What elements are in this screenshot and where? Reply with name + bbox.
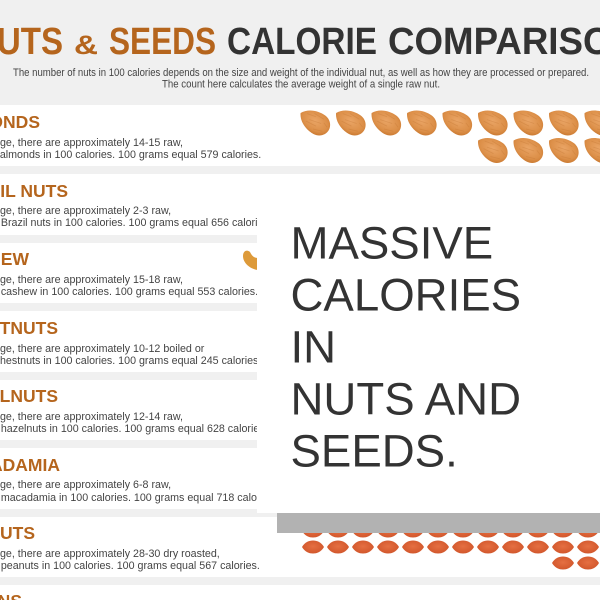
icon: cashew [243, 251, 258, 270]
icons: peanuts [302, 524, 599, 570]
callout overlay [257, 174, 600, 533]
callout overlay: MASSIVE [290, 218, 493, 269]
title [0, 20, 600, 62]
subtitle [13, 67, 589, 90]
icons: almonds [295, 104, 600, 167]
panel: pecans [0, 585, 600, 600]
callout overlay: IN [290, 322, 336, 372]
panel: macadamia [0, 448, 600, 509]
title: CALORIE [227, 20, 377, 62]
callout overlay: CALORIES [290, 270, 521, 320]
panel: chestnuts [0, 311, 600, 372]
callout overlay: NUTS AND [290, 374, 521, 424]
panel: cashew [0, 243, 600, 303]
panel: peanuts [0, 517, 600, 577]
subtitle: The count here calculates the average weight of a single raw nut. [162, 78, 440, 90]
title: & [74, 30, 98, 60]
title: SEEDS [109, 20, 216, 62]
panel: brazil nuts [0, 174, 600, 235]
panel: hazelnuts [0, 380, 600, 440]
panel: almonds [0, 105, 600, 166]
callout overlay: SEEDS. [290, 426, 458, 476]
